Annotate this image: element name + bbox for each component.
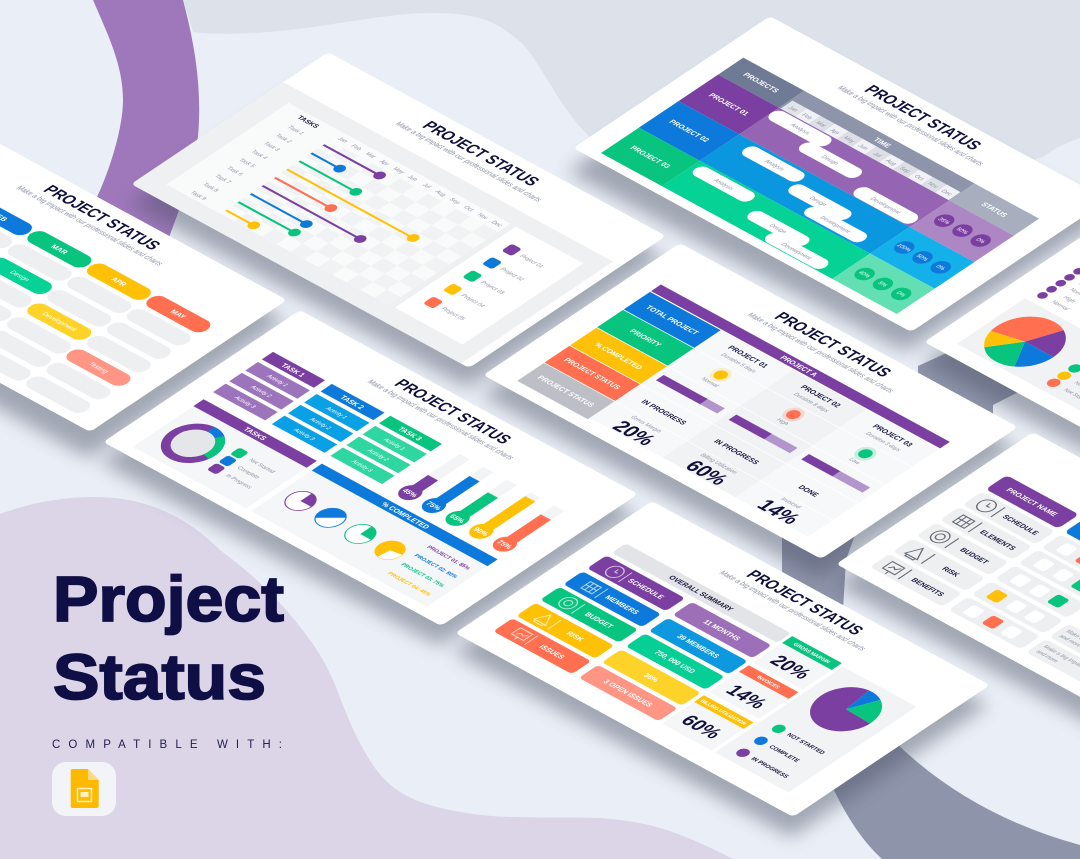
priority dots list — [1037, 268, 1080, 310]
legend panel — [395, 227, 583, 344]
legend panel: Project 04 — [459, 293, 485, 309]
overall summary header: OVERALL SUMMARY — [666, 574, 736, 613]
task 1 column: Activity 1 — [264, 374, 289, 388]
task 2 column: TASK 2 — [338, 394, 367, 411]
grey panel — [957, 298, 1080, 410]
column: project 02: IN PROGRESS — [712, 438, 762, 466]
month header: Dec — [489, 220, 503, 228]
main title: Status — [53, 641, 266, 713]
month header: Jan — [335, 136, 348, 144]
status cells — [948, 534, 1080, 692]
purple header bar — [651, 285, 950, 448]
grey content area — [131, 82, 613, 364]
subtitle: Make a big impact with our professional slides and charts — [14, 184, 165, 267]
slide: tasks and completion — [100, 310, 638, 646]
column: project 03: 14% — [752, 497, 805, 528]
month cells: Dec — [939, 189, 953, 197]
card — [455, 501, 990, 817]
row: project 02: 0% — [934, 264, 946, 272]
month headers: MAR — [49, 243, 71, 256]
subtitle: Make a big impact with our professional slides and charts — [835, 84, 986, 167]
pill: development: Development — [40, 311, 79, 333]
pie legend — [1046, 364, 1080, 399]
main title: Project — [53, 563, 284, 635]
kpi: invoices: INVOICES — [755, 675, 781, 690]
month cells: Jan — [785, 105, 799, 113]
heading: PROJECT STATUS — [770, 310, 896, 380]
month header: Feb — [349, 144, 363, 152]
summary label rows: MEMBERS — [603, 594, 642, 616]
subtitle: Make a big impact with our professional slides and charts — [717, 569, 868, 652]
kpi: gross margin — [753, 636, 842, 689]
task 2 column — [272, 384, 385, 453]
thermometers: 65% — [447, 513, 468, 525]
pie legend: NOT STARTED — [785, 733, 826, 756]
slide: gantt tasks — [129, 52, 666, 388]
note text: and more — [1034, 650, 1059, 664]
month header: Oct — [462, 205, 475, 213]
column: project 01 — [592, 337, 782, 456]
summary value rows: 750, 000 USD — [652, 649, 698, 675]
main title — [53, 563, 284, 713]
row: project 01: 35% — [936, 217, 951, 226]
purple header bar: PROJECT A — [778, 354, 821, 378]
card — [131, 52, 666, 368]
header: project name: PROJECT NAME — [1004, 486, 1060, 518]
row: project 01: 0% — [974, 238, 986, 245]
column: project 03 — [738, 416, 927, 535]
task column: Task 6 — [225, 166, 244, 177]
background band: slate bottom arc — [825, 742, 1080, 859]
overall summary header — [612, 543, 791, 643]
table header row: STATUS — [979, 201, 1010, 219]
task column: Task 5 — [237, 158, 257, 169]
row: project 03: Design — [768, 223, 788, 235]
row text: ELEMENTS — [977, 528, 1018, 552]
row: project 01: PROJECT 01 — [707, 92, 751, 117]
task column: Task 2 — [274, 133, 293, 145]
slide: project A comparison — [481, 243, 1018, 579]
summary value rows: 11 MONTHS — [701, 618, 743, 642]
chart panel — [715, 667, 917, 792]
row text: BENEFITS — [909, 576, 947, 598]
row icons — [878, 497, 1000, 577]
pill: development — [27, 304, 92, 340]
card — [103, 310, 638, 626]
task 2 column: Activity 3 — [291, 427, 316, 442]
task 1 column: Activity 3 — [232, 395, 257, 410]
month cells: Oct — [912, 174, 925, 182]
status squares — [962, 542, 1080, 639]
row: project 03: 5% — [876, 281, 888, 288]
column: project 01: Gross Margin — [629, 415, 662, 434]
kpi: gross margin: 20% — [764, 652, 816, 683]
summary label rows: SCHEDULE — [625, 577, 667, 601]
row text — [907, 513, 1041, 599]
legend panel: Project 01 — [518, 254, 544, 269]
column: project 02 — [665, 376, 854, 496]
subtitle: Make a big impact with our professional slides and charts — [745, 311, 896, 394]
priority dots list: Normal — [1049, 300, 1070, 312]
task 3 column: TASK 3 — [396, 425, 425, 442]
pie: project 03 — [338, 521, 382, 547]
month header: Aug — [432, 189, 448, 198]
row labels: % COMPLETED — [592, 341, 645, 371]
thermometers: 75% — [424, 500, 444, 512]
table header row — [718, 58, 1039, 236]
completion legend: PROJECT 01: 85% — [425, 545, 471, 571]
slide: overall summary — [453, 501, 990, 837]
row: project 01: Development — [868, 197, 902, 215]
month cells: Nov — [926, 181, 940, 190]
task column: Task 1 — [286, 125, 305, 136]
kpi: invoices — [709, 665, 798, 719]
pie: project 01 — [278, 488, 323, 514]
month header: Mar — [363, 152, 378, 160]
background band: slate upper patch — [918, 350, 1040, 425]
task 3 column — [330, 416, 442, 484]
pie chart — [984, 316, 1066, 367]
checker grid — [220, 140, 498, 305]
month cells: Sep — [898, 166, 911, 174]
completion legend: PROJECT 04: 45% — [386, 571, 432, 597]
column: project 01: PROJECT 01 — [726, 344, 771, 369]
summary label rows — [493, 555, 685, 674]
kpi: gross margin: GROSS MARGIN — [791, 642, 831, 665]
kpi: invoices: 14% — [720, 682, 772, 712]
month header — [335, 136, 503, 228]
task 1 column: TASK 1 — [279, 362, 308, 378]
month header: Jul — [420, 182, 432, 190]
row dividers — [898, 507, 1005, 579]
row: project 03: Analysis — [711, 178, 735, 191]
gantt lines — [225, 144, 420, 243]
background blob: purple arc — [80, 0, 199, 240]
pill grid — [0, 232, 190, 413]
background blob: lilac bottom left — [0, 497, 733, 859]
column: project 02: Billing Utilization — [698, 453, 738, 475]
task column: Task 3 — [262, 141, 281, 153]
slide: timeline table — [568, 16, 1080, 352]
month headers: APR — [109, 276, 130, 288]
donut legend: Not Started — [247, 458, 277, 475]
row labels: PROJECT STATUS — [562, 356, 623, 391]
row: project 01 — [678, 75, 1014, 262]
completion legend — [386, 545, 471, 597]
task 1 column — [213, 352, 325, 420]
donut legend — [207, 447, 280, 491]
heading: PROJECT STATUS — [39, 183, 165, 253]
task 3 column: Activity 1 — [381, 437, 406, 452]
month cells: Apr — [827, 128, 842, 136]
background band: slate middle patch — [782, 515, 862, 610]
month header: Nov — [475, 213, 490, 221]
card — [0, 144, 284, 430]
column: project 01: 20% — [607, 418, 660, 449]
donut legend: In Progress — [224, 473, 253, 490]
card — [483, 243, 1018, 559]
tasks panel — [133, 399, 317, 508]
month header: Jun — [405, 174, 418, 182]
pill: design — [0, 258, 52, 294]
task 2 column: Activity 1 — [323, 406, 348, 420]
slide: monthly pills — [0, 116, 287, 458]
card — [836, 432, 1080, 748]
row: project 03: 40% — [856, 270, 871, 279]
donut legend: Complete — [235, 466, 261, 480]
background blob: grey top right — [183, 0, 1080, 230]
pie legend — [733, 723, 829, 781]
card — [573, 16, 1080, 332]
pie legend: IN PROGRESS — [749, 757, 789, 779]
column: project 01: IN PROGRESS — [639, 398, 689, 426]
pill: testing — [66, 350, 130, 386]
thermometers — [393, 452, 567, 555]
summary label rows: ISSUES — [537, 643, 567, 660]
percent completed panel — [251, 464, 498, 607]
task column: Task 9 — [188, 190, 208, 202]
row labels — [870, 492, 1055, 607]
header: project name — [986, 475, 1079, 529]
slide: project name grid — [834, 432, 1080, 768]
tasks panel: TASKS — [241, 426, 269, 442]
month header: May — [391, 167, 406, 176]
note text — [1034, 629, 1080, 679]
column: project 03: Low — [847, 457, 862, 466]
header: blue column — [1064, 518, 1080, 571]
task column: Task 7 — [213, 174, 233, 185]
column: project 01: Duration 5 days — [719, 353, 757, 374]
completion legend: PROJECT 03: 75% — [399, 563, 445, 588]
pie chart — [795, 678, 897, 740]
task 2 column: Activity 2 — [307, 417, 333, 431]
task column: Task 8 — [201, 182, 220, 194]
row: project 01: Analysis — [788, 122, 811, 136]
column: project 01: Normal — [699, 377, 720, 389]
thermometers: 90% — [471, 526, 491, 538]
column: project 02: High — [775, 418, 789, 427]
month header: Sep — [447, 197, 461, 205]
row: project 02: Analysis — [762, 159, 785, 172]
row: project 02: 100% — [895, 243, 912, 253]
month cells: Mar — [814, 121, 828, 129]
summary icons — [508, 564, 628, 643]
table cells — [590, 330, 939, 537]
priority dots list: High — [1061, 295, 1076, 304]
subtitle: Make a big impact with our professional slides and charts — [365, 378, 516, 461]
column: project 02: 60% — [680, 457, 733, 489]
row: project 02: Design — [808, 196, 827, 207]
subtitle: Make a big impact with our professional slides and charts — [393, 120, 544, 203]
heading: PROJECT STATUS — [860, 83, 986, 153]
row: project 02: PROJECT 02 — [667, 118, 712, 144]
row: project 03: 0% — [894, 291, 906, 298]
legend panel: Project 03 — [479, 280, 506, 296]
column: project 02: Duration 8 days — [792, 392, 830, 414]
task 3 column: Activity 3 — [349, 459, 374, 474]
month cells — [781, 101, 961, 200]
compatible with label: COMPATIBLE WITH: — [52, 739, 282, 751]
table header row: PROJECTS — [741, 71, 782, 94]
summary label rows: BUDGET — [582, 611, 616, 630]
summary value rows — [579, 602, 772, 721]
pie: project 02 — [309, 504, 353, 531]
thermometers: 75% — [495, 538, 515, 551]
column: project 03: DONE — [796, 484, 821, 498]
legend panel: Project 05 — [439, 307, 467, 322]
heading: PROJECT STATUS — [390, 377, 516, 447]
task column: TASKS — [295, 115, 321, 130]
task column: Task 4 — [249, 150, 268, 161]
percent completed panel: % COMPLETED — [379, 501, 432, 530]
row: project 03: PROJECT 03 — [628, 144, 673, 170]
summary value rows: 3 OPEN ISSUES — [601, 678, 655, 708]
row: project 02: Development — [818, 216, 851, 234]
column: project 03: PROJECT 03 — [870, 423, 915, 448]
month cells: Aug — [883, 158, 898, 167]
row: project 03: Development — [779, 242, 813, 261]
month cells: Jun — [855, 143, 869, 151]
row text: SCHEDULE — [1000, 513, 1041, 537]
kpi: billing utilization: 60% — [675, 712, 727, 742]
task 3 column: Activity 2 — [365, 448, 390, 463]
pie legend: COMPLETE — [767, 745, 800, 764]
donut chart — [140, 411, 246, 475]
kpi: billing utilization — [662, 695, 754, 751]
icon: google slides — [52, 762, 116, 816]
column: project 03: Duration 3 days — [864, 431, 902, 453]
card — [926, 238, 1080, 427]
row text: RISK — [940, 565, 963, 578]
month headers — [0, 208, 210, 332]
legend panel: Project 02 — [498, 267, 525, 283]
month cells: Jul — [870, 151, 883, 159]
row: project 03 — [601, 128, 935, 314]
heading: PROJECT STATUS — [418, 119, 544, 189]
row labels — [517, 292, 721, 419]
month cells: Feb — [800, 113, 813, 121]
month headers: MAY — [168, 308, 189, 320]
column: project 03: Invoiced — [779, 497, 802, 510]
slide: priority pie — [919, 238, 1080, 458]
heading: PROJECT STATUS — [742, 568, 868, 638]
table header row: TIME — [871, 136, 894, 149]
row labels: TOTAL PROJECT — [643, 304, 702, 336]
row labels: PROJECT STATUS — [535, 374, 597, 409]
thermometers: 45% — [400, 487, 420, 499]
task column — [167, 103, 510, 232]
row: project 01: Design — [819, 155, 839, 166]
summary label rows: RISK — [564, 630, 587, 643]
row labels: PRIORITY — [627, 327, 664, 348]
month header: Apr — [377, 159, 391, 167]
task 1 column: Activity 2 — [248, 384, 273, 399]
column: project 02: PROJECT 02 — [798, 383, 843, 409]
row text: BUDGET — [958, 546, 992, 566]
summary value rows: 39 MEMBERS — [675, 633, 722, 660]
summary value rows: 36% — [641, 672, 662, 684]
summary dividers — [524, 573, 632, 645]
pie: project 04 — [368, 537, 412, 564]
row: project 01: 50% — [954, 227, 969, 236]
pill: testing: Testing — [86, 361, 110, 375]
pill: design: Design — [8, 270, 31, 283]
completion legend: PROJECT 02: 80% — [412, 554, 459, 580]
month cells: May — [841, 136, 857, 145]
row: project 02: 50% — [914, 254, 929, 262]
kpi: billing utilization: BILLING UTILIZATION — [698, 699, 748, 726]
row: project 02 — [639, 101, 974, 289]
